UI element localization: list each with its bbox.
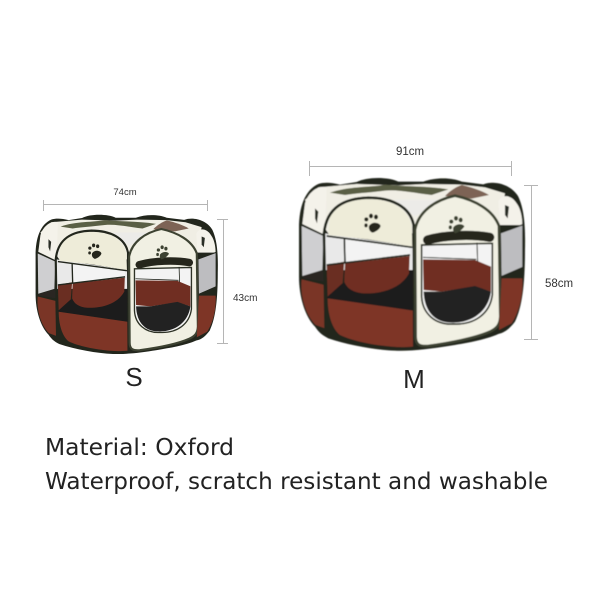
dimension: M width: 91cm	[396, 146, 424, 158]
size label S: S	[125, 362, 143, 392]
dimension: S height	[217, 220, 257, 344]
tent M product image	[299, 178, 525, 351]
dimension: M height: 58cm	[545, 278, 573, 290]
dimension: M height	[524, 186, 573, 340]
size label M: M	[403, 364, 425, 394]
dimension: S width: 74cm	[113, 187, 137, 198]
dimension: M width	[310, 146, 512, 176]
material line: Material: Oxford	[45, 434, 234, 461]
dimension: S width	[44, 187, 208, 211]
features line: Waterproof, scratch resistant and washable	[45, 468, 548, 495]
tent S product image	[36, 215, 218, 354]
dimension: S height: 43cm	[233, 293, 257, 304]
